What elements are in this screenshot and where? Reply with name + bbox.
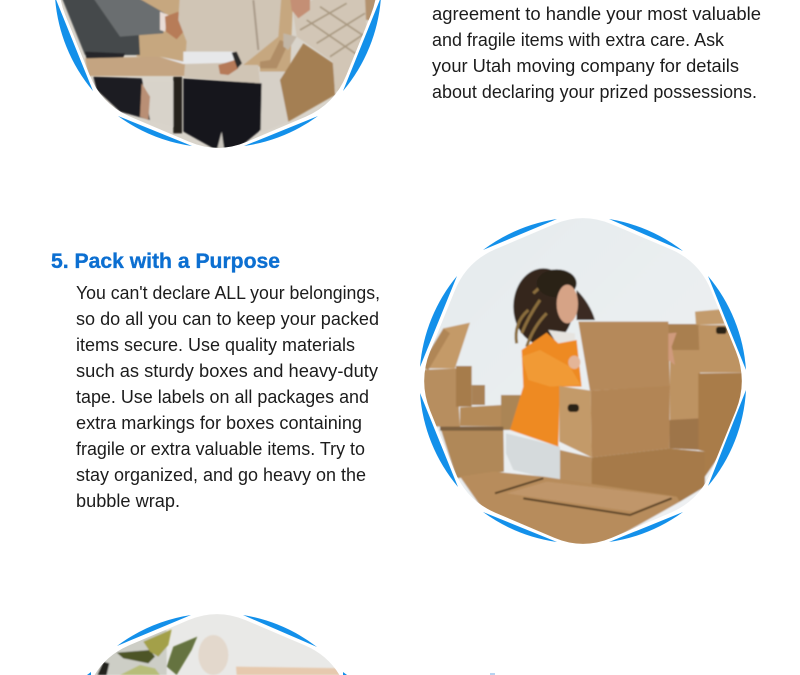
text block: section 5 body: items secure. Use quality materials bbox=[76, 335, 355, 355]
text block: section 5 body: so do all you can to keep your packed bbox=[76, 309, 379, 329]
panel: section 6 photo, top edge bbox=[87, 614, 347, 675]
text block: section 4 body: and fragile items with extra care. Ask bbox=[432, 30, 725, 50]
text block: section 5 body: stay organized, and go heavy on the bbox=[76, 465, 366, 485]
heading: section 6, top edge fragment bbox=[490, 673, 495, 675]
panel: section 4 photo of handshake bbox=[55, 0, 381, 148]
text block: section 4 body: about declaring your prized possessions. bbox=[432, 82, 757, 102]
text block: section 5 body: tape. Use labels on all packages and bbox=[76, 387, 369, 407]
text block: section 5 body bbox=[76, 283, 380, 511]
text block: section 5 body: You can't declare ALL your belongings, bbox=[76, 283, 380, 303]
text block: section 4 body bbox=[432, 4, 761, 102]
text block: section 5 body: extra markings for boxes containing bbox=[76, 413, 362, 433]
text block: section 5 body: bubble wrap. bbox=[76, 491, 180, 511]
text block: section 5 body: fragile or extra valuable items. Try to bbox=[76, 439, 365, 459]
heading: section 5: 5. Pack with a Purpose bbox=[51, 250, 280, 273]
text block: section 4 body: agreement to handle your most valuable bbox=[432, 4, 761, 24]
panel: section 5 photo of woman packing boxes bbox=[420, 218, 746, 544]
text block: section 4 body: your Utah moving company for details bbox=[432, 56, 739, 76]
text block: section 5 body: such as sturdy boxes and heavy-duty bbox=[76, 361, 378, 381]
